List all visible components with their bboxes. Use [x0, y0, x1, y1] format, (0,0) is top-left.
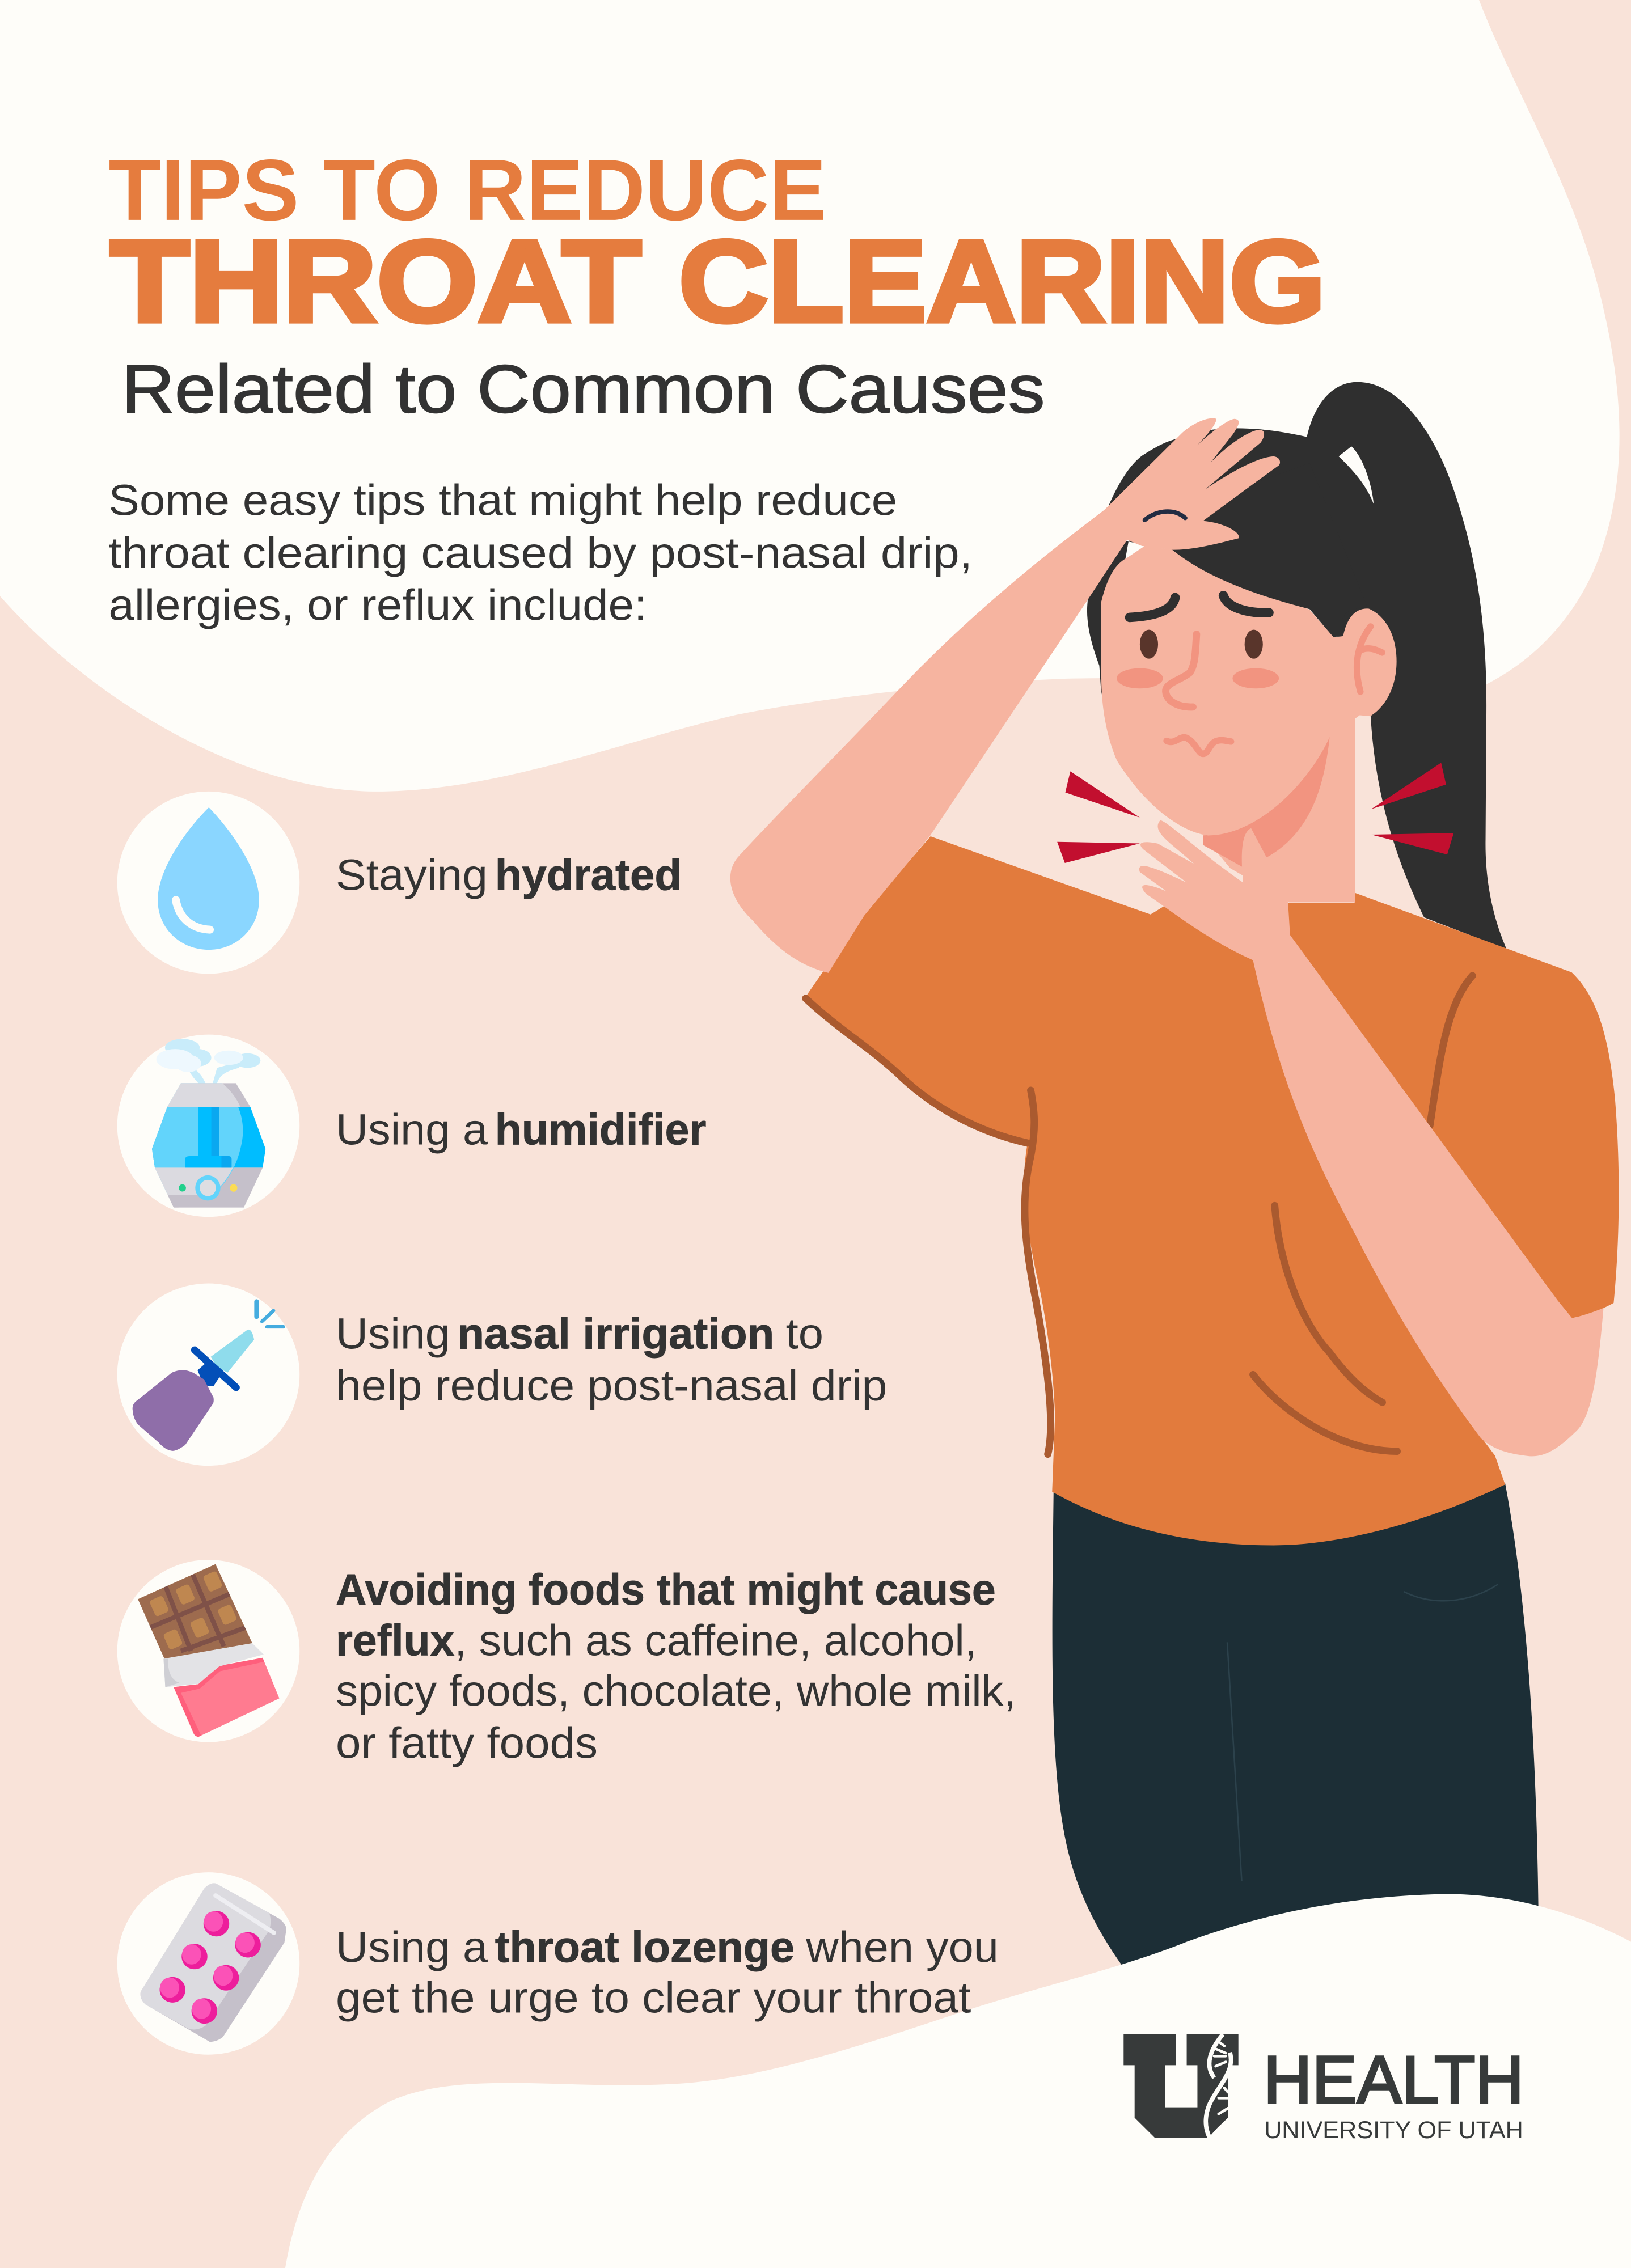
tip text: Avoiding foods that might cause — [336, 1566, 996, 1614]
wordmark: HEALTH — [1264, 2043, 1524, 2118]
intro text — [108, 476, 973, 629]
title line 2: THROAT — [110, 217, 641, 346]
logo: U Health University of Utah — [1123, 2034, 1524, 2143]
tip text: when you — [805, 1923, 999, 1971]
neck shadow — [1203, 737, 1330, 868]
tip 5: lozenge — [117, 1872, 999, 2055]
icon: water drop — [117, 792, 299, 974]
lower arm and hand at throat — [1139, 820, 1604, 1456]
wordmark subtitle: UNIVERSITY OF UTAH — [1264, 2117, 1523, 2143]
tip text: Staying — [336, 851, 488, 899]
woman illustration — [730, 382, 1619, 1975]
tip 3: nasal irrigation — [117, 1284, 887, 1466]
tip text: throat lozenge — [495, 1923, 795, 1971]
shirt — [806, 836, 1619, 1545]
tip text: help reduce post-nasal drip — [336, 1362, 887, 1410]
hair fringe — [1172, 463, 1368, 637]
intro text: allergies, or reflux include: — [108, 581, 647, 629]
tip text: reflux — [336, 1617, 455, 1665]
intro text: Some easy tips that might help reduce — [108, 476, 897, 524]
top cream blob — [0, 0, 1620, 792]
tip text — [336, 1923, 999, 2022]
tip 1: hydrated — [117, 792, 682, 974]
tip text: humidifier — [495, 1106, 706, 1154]
tip text — [336, 1310, 887, 1410]
title line 2: CLEARING — [679, 217, 1326, 346]
tip text: , such as caffeine, alcohol, — [454, 1617, 977, 1665]
icon: block U with DNA — [1123, 2034, 1239, 2138]
tip text: or fatty foods — [336, 1720, 598, 1768]
icon: lozenge blister pack — [117, 1872, 299, 2055]
subtitle: Related to Common Causes — [121, 351, 1045, 427]
shirt fold lines — [806, 976, 1472, 1454]
title line 1: TIPS TO REDUCE — [108, 142, 826, 239]
tip text: Using — [336, 1310, 450, 1358]
title line 2 — [110, 217, 1326, 346]
tip text: get the urge to clear your throat — [336, 1974, 971, 2022]
face features — [1117, 595, 1279, 754]
ear — [1339, 608, 1397, 716]
icon: nasal spray bottle — [117, 1284, 299, 1466]
tip text: nasal irrigation — [457, 1310, 774, 1358]
tip 2: humidifier — [117, 1035, 706, 1217]
icon: chocolate bar — [117, 1560, 299, 1742]
neck — [1203, 713, 1355, 902]
tip text: to — [786, 1310, 823, 1358]
tip text: spicy foods, chocolate, whole milk, — [336, 1668, 1016, 1716]
icon: humidifier — [117, 1035, 299, 1217]
raised arm and hand — [730, 418, 1280, 973]
tip 4: avoid reflux foods — [117, 1560, 1016, 1768]
title block — [108, 142, 1326, 427]
hair — [1087, 382, 1507, 949]
face — [1101, 546, 1360, 835]
bottom cream blob — [285, 1894, 1631, 2268]
intro text: throat clearing caused by post-nasal drip, — [108, 530, 973, 578]
red pain marks — [1057, 763, 1453, 863]
tip text — [336, 1106, 706, 1154]
tip text — [336, 851, 682, 899]
tip text — [336, 1566, 1016, 1768]
tip text: Using a — [336, 1923, 488, 1971]
tip text: hydrated — [495, 851, 682, 899]
tip text: Using a — [336, 1106, 488, 1154]
pants — [1053, 1483, 1549, 1975]
